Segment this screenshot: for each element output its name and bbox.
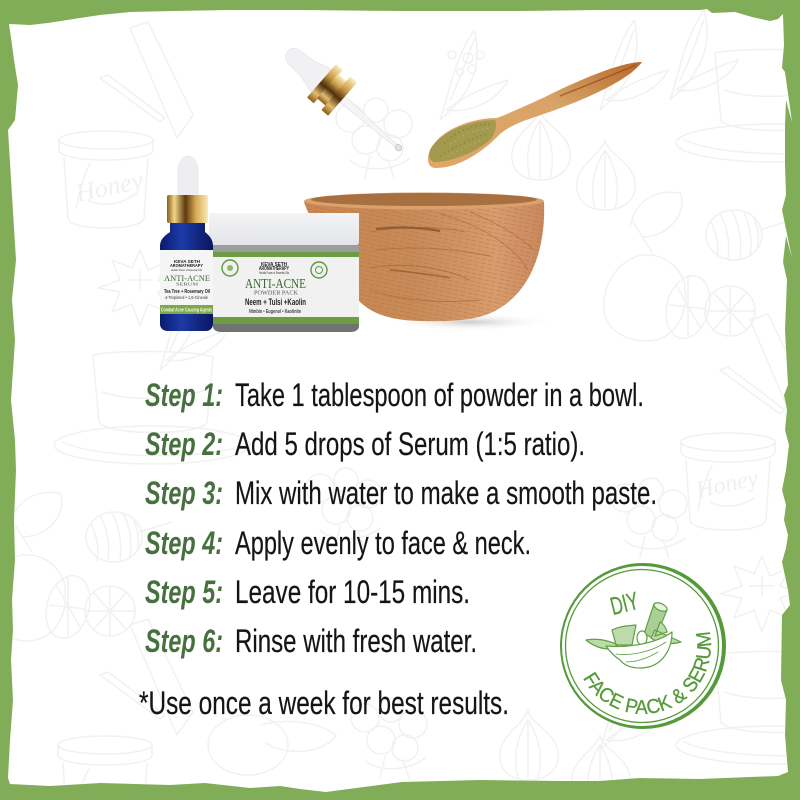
dropper bulb [278,40,332,93]
product: anti-acne powder pack jar: Neem + Tulsi +Kaolin [245,297,306,307]
step 3: Step 3: [145,475,223,511]
badge: DIY face pack and serum [560,563,726,729]
doodle: star anise [98,250,800,632]
doodle: honey jars: Honey [72,165,146,208]
bottle gold collar [167,195,208,223]
badge rings [560,563,726,729]
product: anti-acne powder pack jar: Nimbin • Eugenol • Kaolinite [249,309,301,315]
bottle glass [160,223,213,331]
step 1: Take 1 tablespoon of powder in a bowl. [235,377,644,413]
product: anti-acne serum bottle: AROMATHERAPY [170,263,203,268]
product: anti-acne serum bottle: SERUM [176,282,199,286]
step 5 [145,574,470,610]
product: anti-acne powder pack jar: Holistic Power of Essential Oils [259,271,289,275]
garlic clove [637,631,647,645]
doodle: honey jars: Honey [693,465,761,504]
step 3 [145,475,657,511]
usage note: *Use once a week for best results. [139,685,509,721]
jar body [213,245,359,332]
step 2 [145,426,585,462]
step 6 [145,623,477,659]
dropper gold collar [307,64,357,116]
product: anti-acne powder pack jar: AROMATHERAPY [259,266,289,272]
wooden bowl [304,192,555,331]
bowl wood texture [304,202,544,321]
step 5: Leave for 10-15 mins. [235,574,470,610]
bottle label [160,250,213,314]
steps list [145,377,657,659]
product: anti-acne powder pack jar: POWDER PACK [254,290,299,296]
dropper glass pipette [340,96,401,151]
doodle: garlic and figs [500,110,635,800]
step 2: Step 2: [145,426,223,462]
product: anti-acne serum bottle: 4-Terpineol • 1,8-Cineole [165,295,208,300]
pestle [644,604,667,639]
doodle: leaves [160,10,738,775]
droplet [394,143,403,152]
product: anti-acne powder pack jar: ANTI-ACNE [245,277,306,292]
jar lid [209,213,359,245]
doodle: honey jars [58,131,775,800]
bottle dropper bulb [178,156,198,196]
bowl rim [304,192,544,210]
badge caption: FACE PACK & SERUM [583,632,712,714]
bowl body [304,202,544,321]
step 1 [145,377,644,413]
step 2: Add 5 drops of Serum (1:5 ratio). [235,426,585,462]
product: anti-acne serum bottle: Tea Tree + Rosemary Oil [164,289,210,295]
step 4: Apply evenly to face & neck. [235,525,531,561]
product: anti-acne powder pack jar [209,213,359,332]
product: anti-acne serum bottle: Holistic Power of Essential Oils [171,268,202,272]
dropper [273,35,415,167]
spoon [428,62,642,168]
step 4 [145,525,531,561]
doodle: lemons [0,192,755,643]
jar label text: KEVA SETH [261,262,287,268]
step 6: Step 6: [145,623,223,659]
doodle: honey dippers [86,210,792,562]
badge curve path [583,632,711,714]
doodle: herbs and flowers [306,51,687,778]
step 5: Step 5: [145,574,223,610]
product: anti-acne serum bottle [160,156,213,331]
jar seals [222,260,327,278]
wooden spoon with powder [428,62,642,168]
powder [429,120,496,162]
product: anti-acne serum bottle: ANTI-ACNE [164,274,210,283]
mortar bowl [606,632,672,668]
bowl wood grain [370,212,534,302]
product: anti-acne serum bottle: Combat Acne Causing Agents [161,308,212,314]
step 4: Step 4: [145,525,223,561]
step 1: Step 1: [145,377,223,413]
badge title DIY: DIY [608,587,642,621]
bottle label text: KEVA SETH [174,259,201,264]
icon: mortar and pestle with herbs [586,601,681,668]
jar bands [213,245,359,253]
doodle: cinnamon sticks [100,22,800,735]
herbs [586,622,681,649]
step 3: Mix with water to make a smooth paste. [235,475,657,511]
bowl shadow [385,313,555,331]
step 6: Rinse with fresh water. [235,623,477,659]
bowl inner [311,193,537,206]
